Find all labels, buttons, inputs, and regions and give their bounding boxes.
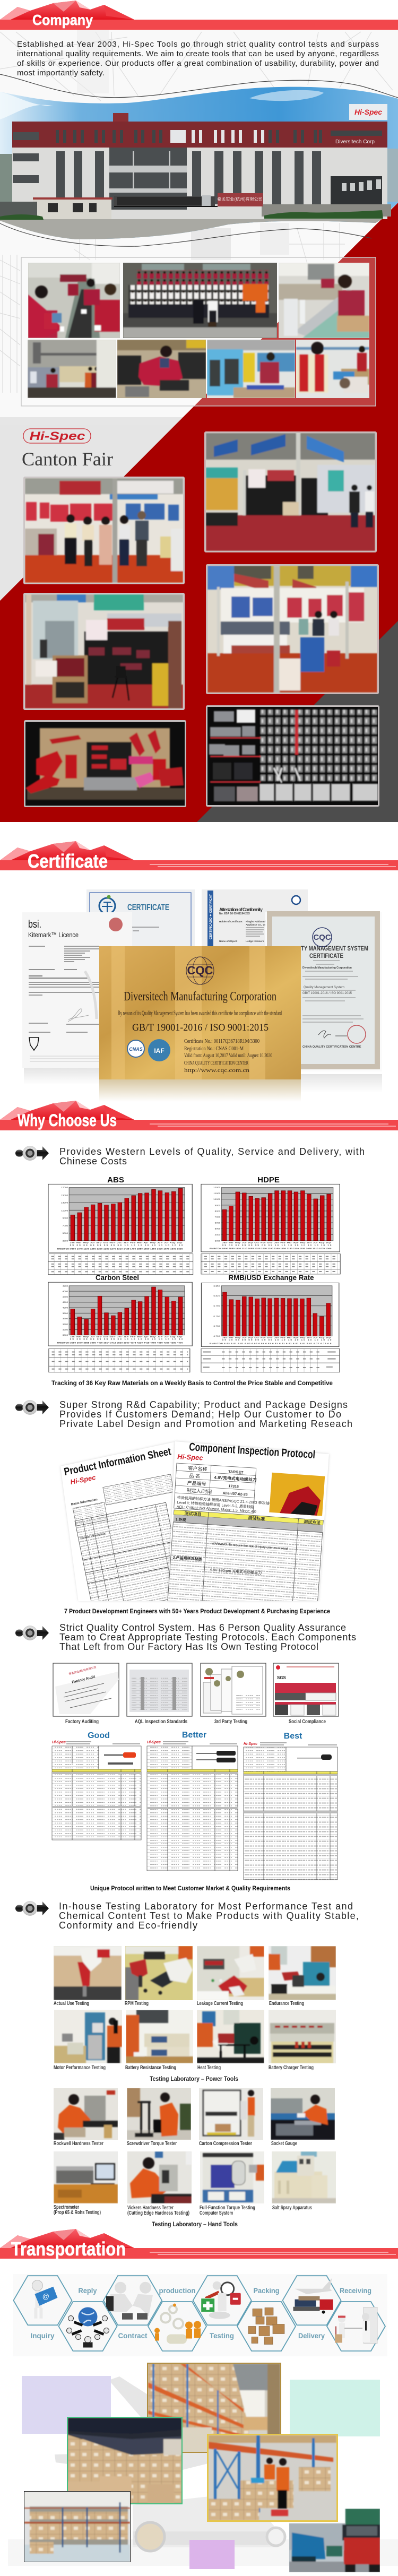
labels: process top: Receiving xyxy=(340,2286,371,2295)
chart: HDPE: Jan' Mar' May' Jul' Sep' Oct' Nov' Dec' Jan' Feb' Mar' Apr' May' Jun' Jul' Aug' Sep' xyxy=(222,1241,331,1244)
labels: process bottom: Contract xyxy=(118,2331,148,2340)
chart: ABS: 5000 xyxy=(63,1232,68,1234)
table: Carbon Steel xyxy=(49,1348,190,1372)
chart: RMB/USD Exchange Rate: 6.850 xyxy=(213,1285,220,1287)
labels: test row 2: Motor Performance Testing xyxy=(54,2065,106,2071)
certificate: QMS certificate: Diversitech Manufacturing Corporation xyxy=(302,966,352,970)
certificate: QMS certificate: CQC xyxy=(313,933,331,942)
text block: reason 4 xyxy=(59,1901,359,1931)
certificate: CQC gold plaque: CNAS xyxy=(129,1047,143,1052)
document: best protocol xyxy=(244,1741,338,1880)
certificate: top right: Appliance Co., Ltd xyxy=(246,923,267,926)
document: best protocol: Hi-Spec xyxy=(244,1742,257,1746)
step: inquiry xyxy=(13,2276,72,2325)
document: component inspection protocol: 测试标准 xyxy=(248,1515,265,1522)
labels: process bottom: Inquiry xyxy=(31,2331,55,2340)
chart: HDPE: 3000 xyxy=(215,1240,221,1242)
heading: HDPE: HDPE xyxy=(257,1175,280,1185)
logo: Hi-Spec: Hi-Spec xyxy=(30,429,85,443)
heading: ABS: ABS xyxy=(107,1175,124,1185)
photo: worker assembling cases xyxy=(117,340,206,398)
document: better protocol: Hi-Spec xyxy=(147,1741,161,1744)
chart: HDPE: 5000 xyxy=(215,1228,221,1230)
heading: Better: Better xyxy=(182,1731,206,1740)
labels: test row 4: Salt Spray Apparatus xyxy=(272,2205,312,2211)
chart: HDPE: 12000 xyxy=(213,1187,221,1189)
photo: quality control worker xyxy=(296,340,369,398)
text block: reason 3: Team to Creat Appropriate Testing Protocols. Each Components xyxy=(59,1632,356,1643)
card: factory auditing xyxy=(53,1663,119,1716)
photo: carton compression tester xyxy=(199,2088,263,2140)
document: component inspection protocol: 测试方法 xyxy=(304,1519,321,1525)
certificate: CQC gold plaque: IAF xyxy=(154,1047,165,1054)
text block: company intro: most importantly safety. xyxy=(17,68,105,77)
section header: Certificate xyxy=(0,841,398,872)
document: component inspection protocol: 客户名称 xyxy=(188,1465,207,1472)
certificate: QMS certificate: Quality Management System xyxy=(304,986,344,989)
chart: HDPE: 09 09 09 09 09 09 09 09 10 10 10 10 10 10 10 10 10 xyxy=(222,1244,332,1246)
section header: Certificate: Certificate xyxy=(28,850,108,872)
labels: test row 2: Battery Resistance Testing xyxy=(125,2065,176,2071)
heading: hand tools lab: Testing Laboratory – Hand Tools xyxy=(152,2220,238,2228)
panel: lilac tile xyxy=(189,2540,235,2569)
step: delivery xyxy=(282,2276,341,2325)
text block: reason 2: Private Label Design and Promotion and Marketing Reseach xyxy=(59,1419,352,1429)
chart: Carbon Steel: 3800 xyxy=(63,1312,68,1315)
card: third party testing xyxy=(201,1663,266,1716)
photo: motor performance testing xyxy=(54,2010,122,2063)
labels: test row 4: (Prop 65 & Rohs Testing) xyxy=(54,2210,101,2216)
chart: ABS: 9000 xyxy=(63,1217,68,1219)
labels: test row 1: Endurance Testing xyxy=(269,2001,304,2007)
photo: vickers hardness tester xyxy=(127,2151,192,2203)
panel: lavender tile xyxy=(22,2376,111,2434)
chart: HDPE: 11000 xyxy=(213,1192,221,1195)
certificate: QMS certificate xyxy=(265,912,382,1071)
labels: process bottom: Testing xyxy=(210,2331,234,2340)
text block: company intro: international quality requirements. We aim to create tools that can be used by anyone, regardless xyxy=(17,49,379,58)
chart: ABS: 17000 xyxy=(61,1187,68,1189)
chart: Carbon Steel: 4000 xyxy=(63,1307,68,1309)
document: component inspection protocol: 4.8V充电式电动螺丝刀 xyxy=(214,1474,257,1483)
step: testing xyxy=(193,2276,252,2325)
section header: Why Choose Us: Why Choose Us xyxy=(18,1111,117,1130)
chart: RMB/USD Exchange Rate: 6.760 xyxy=(213,1315,220,1317)
document: component inspection protocol: 检验使用的抽样方法:按照ANSI/ASQC Z1.4-2003 单次抽样计划 xyxy=(177,1495,281,1506)
text block: reason 3: That Left from Our Factory Has Its Own Testing Protocol xyxy=(59,1641,318,1652)
certificate: QMS certificate: GB/T 19001-2016 / ISO 9001:2015 xyxy=(302,992,352,995)
icon: bullet arrow 1 xyxy=(15,1146,49,1161)
document: component inspection protocol: 1.外观 xyxy=(175,1517,186,1523)
document: component inspection protocol: AQL: Critical: Not Allowed, Major: 1.5, Minor: 4.0 xyxy=(177,1505,256,1514)
step: production xyxy=(148,2302,206,2351)
process: order to delivery steps xyxy=(13,2274,387,2356)
certificate: CQC gold plaque: Certificate No.: 00117Q36718R1M/3300 xyxy=(184,1039,259,1044)
labels: test row 1 xyxy=(54,2001,304,2007)
decorative wave lines xyxy=(0,74,398,246)
photo: booth with staff xyxy=(206,564,379,694)
certificate: top right: Attestation of Conformity xyxy=(219,907,263,912)
chart: HDPE: 7000 xyxy=(215,1216,221,1218)
document: component inspection protocol: Level II; 特殊检验抽样采用 Level S-2, 质量缺陷 xyxy=(177,1500,254,1509)
labels: quality control cards: 3rd Party Testing xyxy=(214,1719,247,1725)
chart: ABS: 15000 xyxy=(61,1194,68,1196)
labels: test row 4: (Cutting Edge Hardness Testing) xyxy=(127,2210,189,2216)
certificate: QMS certificate: CHINA QUALITY CERTIFICATION CENTRE xyxy=(302,1045,361,1049)
labels: test row 3: Screwdriver Torque Tester xyxy=(127,2141,177,2147)
labels: process bottom: Delivery xyxy=(298,2331,325,2340)
photo: power tool display xyxy=(24,720,186,807)
photo: assembly line workers xyxy=(28,263,120,338)
certificate: CQC gold plaque: GB/T 19001-2016 / ISO 9001:2015 xyxy=(132,1022,269,1033)
step: receiving xyxy=(327,2302,385,2351)
labels: test row 4: Spectrometer xyxy=(54,2205,79,2210)
document: component inspection protocol: 制定人/时间 xyxy=(187,1487,212,1494)
labels: process top: Packing xyxy=(254,2286,279,2295)
document: better protocol xyxy=(147,1740,238,1871)
photo: endurance testing xyxy=(269,1946,336,2000)
card: social compliance xyxy=(273,1663,339,1716)
certificate: top right: CERTIFICADO ✦ CERTIFICAT xyxy=(209,894,213,939)
certificate: CQC gold plaque: Registration No.: CNAS C001-M xyxy=(184,1046,244,1052)
chart: Carbon Steel: RMB/TON 3950 3670 3585 3950 4420 3814 3715 3820 3960 4275 4220 4415 4750 4650 4390 4250 4400 xyxy=(57,1342,183,1344)
document: product information sheet: Hi-Spec xyxy=(70,1473,97,1486)
labels: test row 2: Heat Testing xyxy=(197,2065,221,2071)
table: RMB/USD Exchange Rate xyxy=(201,1348,340,1372)
card: factory auditing: 希孟实业(杭州)有限公司 xyxy=(68,1665,97,1676)
chart: RMB/USD Exchange Rate: 6.730 xyxy=(213,1325,220,1327)
photo: booth team xyxy=(23,477,185,584)
photo: blow moulding machine xyxy=(28,340,116,398)
photo: factory building xyxy=(0,87,398,239)
text block: reason 2 xyxy=(59,1399,352,1429)
labels: test row 4 xyxy=(54,2205,312,2216)
photo: injection moulding xyxy=(207,340,295,398)
labels: test row 4: Full-Function Torque Testing xyxy=(200,2205,255,2211)
text block: reason 1: Provides Western Levels of Quality, Service and Delivery, with xyxy=(59,1146,365,1157)
photo: rpm testing xyxy=(125,1946,193,2000)
chart: HDPE: 10000 xyxy=(213,1198,221,1200)
photo: factory building: Diversitech Corp xyxy=(335,139,375,145)
chart: Carbon Steel: 4600 xyxy=(63,1290,68,1292)
document: good protocol: Hi-Spec xyxy=(52,1741,66,1744)
section: company background sketch xyxy=(0,30,398,425)
heading: Best: Best xyxy=(284,1732,302,1741)
heading: Canton Fair: Canton Fair xyxy=(22,448,113,470)
chart: ABS: 13000 xyxy=(61,1201,68,1204)
document: component inspection protocol: Allen/07-02-26 xyxy=(222,1492,248,1497)
photo: screwdriver torque tester xyxy=(127,2088,191,2140)
labels: process top: Reply xyxy=(79,2286,97,2295)
certificate: top center xyxy=(86,889,195,948)
text block: reason 2: Provides If Customers Demand; Help Our Customer to Do xyxy=(59,1409,341,1420)
photo: warehouse aisle xyxy=(147,2363,281,2453)
step: packing xyxy=(237,2302,296,2351)
text block: reason 3: Strict Quality Control System. Has 6 Person Quality Assurance xyxy=(59,1622,346,1633)
certificate: QMS certificate: TY MANAGEMENT SYSTEM xyxy=(301,945,368,952)
labels: test row 3 xyxy=(54,2141,297,2147)
photo: hand tool wall xyxy=(206,705,379,807)
text block: reason 4: Conformity and Eco-friendly xyxy=(59,1920,197,1931)
text block: reason 4: Chemical Content Test to Make Products with Quality Stable, xyxy=(59,1911,359,1921)
document: component inspection protocol xyxy=(168,1441,329,1612)
photo: factory building: Hi-Spec xyxy=(354,108,382,116)
labels: test row 3: Rockwell Hardness Tester xyxy=(54,2141,103,2147)
labels: test row 1: Leakage Current Testing xyxy=(197,2001,243,2007)
photo: leakage current testing xyxy=(197,1946,264,2000)
document: component inspection protocol: 17316 xyxy=(228,1484,239,1489)
chart: Carbon Steel: 3400 xyxy=(63,1323,68,1325)
labels: test row 2: Battery Charger Testing xyxy=(269,2065,314,2071)
chart: HDPE: 9000 xyxy=(215,1204,221,1206)
chart: HDPE: 4000 xyxy=(215,1233,221,1236)
background: faded plane and truck xyxy=(8,2376,398,2566)
photo: heat testing xyxy=(197,2010,264,2063)
certificate: CQC gold plaque: Diversitech Manufacturing Corporation xyxy=(124,990,276,1004)
caption: raw materials tracking: Tracking of 36 Key Raw Materials on a Weekly Basis to Control the Price Stable and Competitive xyxy=(51,1379,333,1387)
document: component inspection protocol: 品 名 xyxy=(189,1473,200,1479)
caption: unique protocol: Unique Protocol written to Meet Customer Market & Quality Requirements xyxy=(90,1885,290,1892)
chart: Carbon Steel: 3200 xyxy=(63,1328,68,1331)
text block: reason 3 xyxy=(59,1622,356,1652)
labels: quality control cards: AQL Inspection Standards xyxy=(135,1719,187,1725)
red diagonal background xyxy=(176,203,398,425)
document: component inspection protocol: 2.产品规格及材质 xyxy=(172,1555,202,1562)
text block: reason 1: Chinese Costs xyxy=(59,1156,127,1166)
labels: test row 4: Computer System xyxy=(200,2210,233,2216)
section header: Company xyxy=(0,1,398,30)
section: canton fair background xyxy=(0,425,398,822)
icon: bullet arrow 4 xyxy=(15,1901,49,1916)
document: product information sheet: Content Information: xyxy=(80,1532,107,1540)
chart: RMB/USD Exchange Rate: Jan' Mar' May' Jul' Sep' Oct' Nov' Dec' Jan' Feb' Mar' Apr' May' Jun' Jul' Aug' Sep' xyxy=(222,1336,331,1338)
labels: test row 2 xyxy=(54,2065,314,2071)
labels: process bottom xyxy=(31,2331,325,2340)
text block: reason 2: Super Strong R&d Capability; Product and Package Designs xyxy=(59,1399,348,1410)
step: reply xyxy=(58,2302,117,2351)
photo: factory building: 希孟实业(杭州)有限公司 xyxy=(217,196,263,202)
document: component inspection protocol: Hi-Spec xyxy=(177,1453,204,1462)
section header: Company: Company xyxy=(32,12,93,28)
certificate: top right: Ningbo Haitian Electric xyxy=(246,920,272,923)
certificate: QMS certificate: CERTIFICATE xyxy=(309,952,343,959)
chart: RMB/USD Exchange Rate: 09 09 09 09 09 09 09 09 10 10 10 10 10 10 10 10 10 xyxy=(222,1339,332,1341)
photo: team group portrait xyxy=(123,263,277,338)
certificate: CQC gold plaque: http://www.cqc.com.cn xyxy=(184,1068,249,1074)
chart: Carbon Steel: 4800 xyxy=(63,1285,68,1287)
panel: factory photo frame xyxy=(21,257,376,406)
chart: ABS xyxy=(48,1184,192,1252)
certificate: bsi kitemark licence: bsi. xyxy=(28,919,41,930)
chart: Carbon Steel xyxy=(48,1282,192,1346)
labels: test row 3: Carton Compression Tester xyxy=(199,2141,252,2147)
certificate: bsi kitemark licence xyxy=(22,912,132,1068)
section header: Transportation: Transportation xyxy=(11,2238,126,2260)
certificate: CQC gold plaque xyxy=(99,946,301,1079)
labels: quality control cards: Social Compliance xyxy=(289,1719,326,1725)
labels: test row 1: Actual Use Testing xyxy=(54,2001,89,2007)
chart: ABS: Jan' Mar' May' Jul' Sep' Oct' Nov' Dec' Jan' Feb' Mar' Apr' May' Jun' Jul' Aug' Sep' xyxy=(70,1241,183,1244)
certificate: top right: Holder of Certificate: xyxy=(219,920,243,923)
labels: test row 3: Socket Gauge xyxy=(271,2141,297,2147)
card: factory auditing: Factory Audit xyxy=(72,1675,96,1684)
icon: bullet arrow 3 xyxy=(15,1626,49,1640)
chart: HDPE xyxy=(201,1184,340,1252)
photo: spectrometer xyxy=(54,2151,118,2203)
heading: RMB/USD Exchange Rate: RMB/USD Exchange Rate xyxy=(228,1273,314,1282)
certificate reflections xyxy=(24,1068,382,1102)
photo: salt spray apparatus xyxy=(272,2151,336,2203)
photo: booth overview xyxy=(204,431,377,552)
photo: socket gauge xyxy=(271,2088,335,2140)
panel: mint tile xyxy=(290,2380,380,2436)
chart: RMB/USD Exchange Rate: 6.790 xyxy=(213,1305,220,1307)
chart: Carbon Steel: 3000 xyxy=(63,1334,68,1336)
photo: battery resistance testing xyxy=(126,2010,193,2063)
step: contract xyxy=(103,2276,162,2325)
certificate: CQC gold plaque: CQC xyxy=(187,964,213,977)
document: product information sheet xyxy=(60,1442,185,1614)
chart: ABS: RMB/TON 9500 1045 1190 1250 1290 1250 1270 1310 1425 1490 1550 1560 1650 1620 1570 1600 1680 xyxy=(57,1248,183,1250)
heading: Carbon Steel: Carbon Steel xyxy=(96,1273,139,1282)
certificate: top center: CERTIFICATE xyxy=(127,902,169,912)
table: ABS xyxy=(48,1254,193,1275)
card: AQL inspection standards xyxy=(127,1663,192,1716)
certificate: top right xyxy=(202,889,308,946)
certificate: bsi kitemark licence: Kitemark™ Licence xyxy=(28,931,79,939)
certificate: CQC gold plaque: Valid from: August 10,2017 Valid until: August 10,2020 xyxy=(184,1053,272,1059)
certificate: top right: Hedge trimmers xyxy=(246,940,264,943)
photo: worker packing cases xyxy=(279,263,369,338)
certificate: top right: Name of Object: xyxy=(219,940,238,943)
document: product information sheet: Basic Information xyxy=(71,1498,98,1507)
photo: booth shelves xyxy=(23,593,185,710)
certificate: CQC gold plaque: CHINA QUALITY CERTIFICATION CENTER xyxy=(184,1060,248,1066)
chart: Carbon Steel: 4200 xyxy=(63,1301,68,1303)
labels: process top xyxy=(79,2286,371,2295)
chart: RMB/USD Exchange Rate: RMB/TON 6.83 6.81 6.81 6.82 6.82 6.81 6.81 6.81 6.81 6.81 6.81 6.81 6.81 6.77 6.76 6.8 xyxy=(210,1342,332,1345)
table: HDPE xyxy=(201,1254,340,1274)
chart: Carbon Steel: 3600 xyxy=(63,1318,68,1320)
heading: power tools lab: Testing Laboratory – Power Tools xyxy=(150,2075,238,2082)
chart: ABS: 11000 xyxy=(61,1209,68,1212)
chart: RMB/USD Exchange Rate xyxy=(201,1283,339,1347)
photo: warehouse staff xyxy=(207,2434,338,2522)
chart: Carbon Steel: Jan' Mar' May' Jul' Sep' Oct' Nov' Dec' Jan' Feb' Mar' Apr' May' Jun' Jul' Aug' Sep' xyxy=(70,1335,183,1338)
chart: HDPE: 6000 xyxy=(215,1222,221,1224)
document: component inspection protocol: TARGET xyxy=(228,1470,244,1475)
text block: company intro xyxy=(17,40,379,77)
heading: Good: Good xyxy=(88,1731,110,1740)
chart: Carbon Steel: 4400 xyxy=(63,1295,68,1298)
certificate: top right: No. E5A 16 05 61194 283 xyxy=(219,912,250,915)
photo: container trucks xyxy=(289,2509,380,2572)
chart: RMB/USD Exchange Rate: 6.820 xyxy=(213,1294,220,1297)
photo: battery charger testing xyxy=(269,2010,336,2063)
text block: company intro: Established at Year 2003, Hi-Spec Tools go through strict quality control tests and surpass xyxy=(17,40,379,49)
chart: HDPE: RMB/TON 8000 8850 1130 1110 1055 1020 1030 1100 1160 1150 1150 1130 1150 1090 1010 1070 1090 xyxy=(210,1247,332,1250)
card: social compliance: SGS xyxy=(277,1675,287,1680)
document: component inspection protocol: 产品编号 xyxy=(187,1480,206,1487)
section header: Transportation xyxy=(0,2229,398,2260)
logo: Hi-Spec xyxy=(23,429,91,443)
labels: test row 4: Vickers Hardness Tester xyxy=(127,2205,174,2211)
text block: reason 1 xyxy=(59,1146,365,1166)
document: component inspection protocol: WARNING: To reduce the risk of injury user must read xyxy=(211,1542,288,1551)
chart: ABS: 7000 xyxy=(63,1224,68,1227)
labels: quality control cards xyxy=(65,1719,326,1725)
labels: quality control cards: Factory Auditing xyxy=(65,1719,99,1725)
photo: actual use testing xyxy=(54,1946,122,2000)
chart: RMB/USD Exchange Rate: 6.700 xyxy=(213,1335,220,1337)
text block: reason 4: In-house Testing Laboratory for Most Performance Test and xyxy=(59,1901,353,1912)
chart: Carbon Steel: 09 09 09 09 09 09 09 09 10 10 10 10 10 10 10 10 10 xyxy=(70,1338,183,1340)
chart: ABS: 3000 xyxy=(63,1240,68,1242)
labels: process top: production xyxy=(159,2286,195,2295)
document: component inspection protocol: 4.8V 180rpm 充电式电动螺丝刀 xyxy=(210,1567,262,1576)
step: inquiry: @ xyxy=(42,2293,49,2301)
document: component inspection protocol: 测试项目 xyxy=(184,1510,202,1517)
chart: HDPE: 8000 xyxy=(215,1210,221,1212)
icon: bullet arrow 2 xyxy=(15,1400,49,1415)
photo: full-function torque tester xyxy=(200,2151,264,2203)
photo: warehouse stacks xyxy=(67,2417,183,2504)
caption: product development: 7 Product Development Engineers with 50+ Years Product Development & Purchasing Experience xyxy=(64,1607,330,1615)
section header: Why Choose Us xyxy=(0,1101,398,1130)
photo: rockwell hardness tester xyxy=(54,2088,118,2140)
document: good protocol xyxy=(52,1740,141,1840)
photo: warehouse racks xyxy=(24,2491,131,2562)
chart: ABS: 09 09 09 09 09 09 09 09 10 10 10 10 10 10 10 10 10 xyxy=(70,1244,183,1246)
labels: test row 1: RPM Testing xyxy=(125,2001,149,2007)
text block: company intro: of skills or experience. Our products offer a great combination of usability, durability, power and xyxy=(17,59,379,68)
